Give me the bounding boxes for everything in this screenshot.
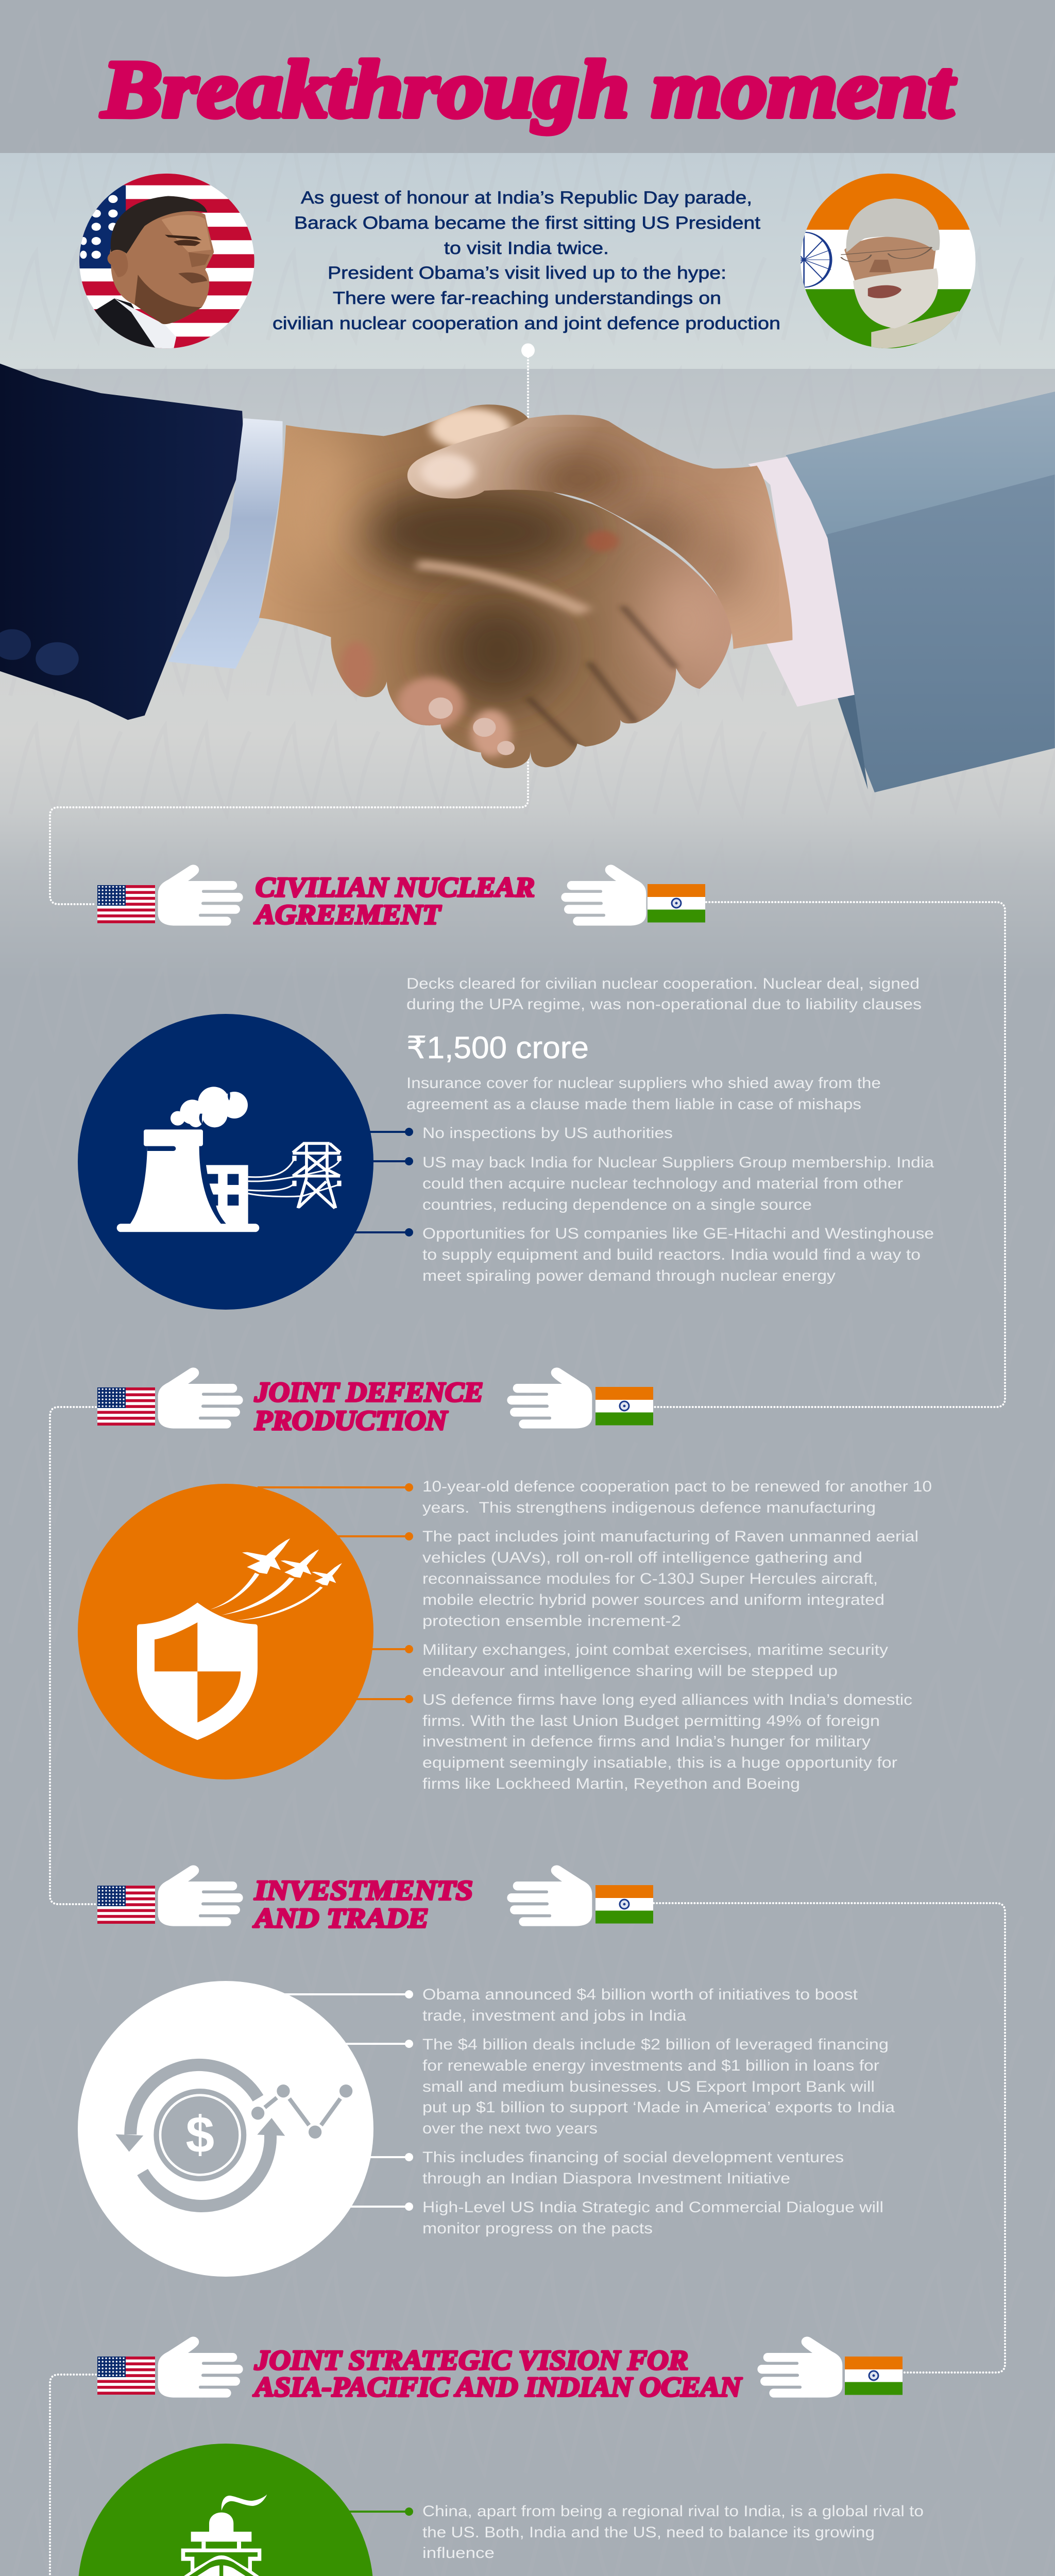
section 4 heading: joint strategic vision [97, 2337, 903, 2402]
flag: USA [97, 1886, 155, 1924]
panel: section 3 content [78, 1981, 895, 2277]
text block: small and medium businesses. US Export Import Bank will [422, 2078, 875, 2095]
section 2 heading: joint defence production [97, 1368, 653, 1436]
icon: ship on hand [140, 2495, 323, 2576]
text block: during the UPA regime, was non-operational due to liability clauses [406, 996, 922, 1013]
text block [422, 1986, 895, 2237]
right hand [407, 415, 792, 649]
icon: currency cycle and graph [115, 2065, 352, 2206]
icon: right hand [757, 2337, 842, 2398]
intro text: to visit India twice. [444, 239, 609, 258]
circle [78, 2444, 373, 2576]
heading text: PRODUCTION [254, 1405, 448, 1436]
panel: section 4 content [78, 2444, 925, 2576]
figure: 1,500 crore: ₹1,500 crore [406, 1030, 589, 1065]
bullet connectors [258, 1484, 413, 1703]
portrait: Modi on Indian flag [801, 173, 976, 348]
text block: No inspections by US authorities [422, 1125, 673, 1142]
text block: High-Level US India Strategic and Commercial Dialogue will [422, 2199, 883, 2216]
left shirt cuff [168, 418, 283, 669]
text block: The pact includes joint manufacturing of Raven unmanned aerial [422, 1528, 918, 1545]
text block: to supply equipment and build reactors. India would find a way to [422, 1246, 921, 1263]
panel: section 1 content [78, 975, 934, 1310]
icon: currency cycle and graph: $ [186, 2106, 214, 2163]
text block: for renewable energy investments and $1 billion in loans for [422, 2057, 879, 2074]
portrait: Obama on US flag [74, 172, 262, 350]
text block: equipment seemingly insatiable, this is a huge opportunity for [422, 1754, 897, 1771]
heading text: CIVILIAN NUCLEAR [256, 872, 535, 903]
heading text: JOINT DEFENCE [254, 1377, 483, 1408]
text block: US may back India for Nuclear Suppliers Group membership. India [422, 1154, 934, 1171]
icon: right hand [561, 865, 646, 926]
icon: left hand [158, 865, 243, 926]
right sleeve [786, 392, 1055, 792]
heading text: AND TRADE [253, 1903, 429, 1934]
intro text: There were far-reaching understandings on [333, 289, 721, 308]
text block: vehicles (UAVs), roll on-roll off intelligence gathering and [422, 1549, 862, 1566]
text block: endeavour and intelligence sharing will be stepped up [422, 1663, 838, 1680]
text block: through an Indian Diaspora Investment Initiative [422, 2170, 790, 2187]
text block: protection ensemble increment-2 [422, 1613, 681, 1630]
bullet connectors [258, 1991, 413, 2210]
text block: Obama announced $4 billion worth of initiatives to boost [422, 1986, 858, 2003]
text block: monitor progress on the pacts [422, 2220, 653, 2237]
text block: could then acquire nuclear technology and material from other [422, 1175, 903, 1192]
text block: Insurance cover for nuclear suppliers who shied away from the [406, 1075, 881, 1092]
text block: Decks cleared for civilian nuclear cooperation. Nuclear deal, signed [406, 975, 920, 992]
flag: India [845, 2357, 903, 2395]
icon: nuclear plant and pylon [117, 1087, 342, 1232]
intro text: As guest of honour at India’s Republic Day parade, [301, 188, 752, 208]
icon: left hand [158, 2337, 243, 2398]
panel: intro band [0, 153, 1055, 369]
icon: left hand [158, 1368, 243, 1429]
icon: right hand [507, 1866, 592, 1926]
heading text [253, 2345, 742, 2402]
heading text: AGREEMENT [254, 899, 441, 930]
text block: reconnaissance modules for C-130J Super Hercules aircraft, [422, 1570, 878, 1587]
text block: Military exchanges, joint combat exercises, maritime security [422, 1641, 888, 1658]
handshake photo [0, 364, 1055, 792]
text block: meet spiraling power demand through nuclear energy [422, 1267, 836, 1284]
section 1 heading: civilian nuclear agreement [97, 865, 705, 930]
text block: firms. With the last Union Budget permitting 49% of foreign [422, 1713, 880, 1730]
intro text: President Obama’s visit lived up to the hype: [328, 263, 726, 283]
connector dot [521, 343, 535, 358]
heading text: ASIA-PACIFIC AND INDIAN OCEAN [253, 2371, 742, 2402]
text block: This includes financing of social development ventures [422, 2149, 844, 2166]
dotted connector: section 3 to 4 [654, 1903, 1005, 2372]
right shirt cuff [748, 457, 855, 707]
icon: right hand [507, 1368, 592, 1429]
heading text [254, 1377, 483, 1436]
intro text: Barack Obama became the first sitting US President [294, 213, 761, 233]
circle [78, 1014, 373, 1310]
text block: influence [422, 2545, 495, 2562]
heading text: INVESTMENTS [254, 1875, 473, 1906]
dotted connector: section 1 to 2 [654, 902, 1005, 1407]
flag: India [648, 884, 705, 922]
bullet connectors [258, 1128, 413, 1236]
panel: section 2 content [78, 1478, 932, 1792]
text block: China, apart from being a regional rival to India, is a global rival to [422, 2503, 924, 2520]
icon: chakra [801, 232, 832, 287]
text block [422, 2503, 925, 2576]
text block: mobile electric hybrid power sources and uniform integrated [422, 1591, 884, 1608]
flag: USA [97, 2357, 155, 2395]
flag: USA [97, 885, 155, 923]
icon: shield and jets [137, 1538, 342, 1740]
dotted connector: section 4 to footer [50, 2375, 96, 2576]
text block: 10-year-old defence cooperation pact to be renewed for another 10 [422, 1478, 932, 1495]
circle [78, 1981, 373, 2277]
left hand [259, 404, 732, 768]
text block [406, 975, 934, 1284]
text block: firms like Lockheed Martin, Reyethon and Boeing [422, 1775, 800, 1792]
flag: India [595, 1885, 653, 1924]
text block: The $4 billion deals include $2 billion of leveraged financing [422, 2036, 889, 2053]
title: Breakthrough moment [101, 44, 956, 134]
intro text [273, 188, 780, 333]
text block: investment in defence firms and India’s hunger for military [422, 1733, 871, 1750]
text block: agreement as a clause made them liable in case of mishaps [406, 1096, 861, 1113]
circle [78, 1484, 373, 1780]
text block: Opportunities for US companies like GE-Hitachi and Westinghouse [422, 1225, 934, 1242]
text block: years. This strengthens indigenous defence manufacturing [422, 1499, 876, 1516]
left sleeve [0, 364, 244, 720]
flag: India [595, 1387, 653, 1425]
dotted connector: intro to section 1 [50, 357, 528, 904]
heading text [253, 1875, 473, 1934]
text block: put up $1 billion to support ‘Made in America’ exports to India [422, 2099, 895, 2116]
icon: left hand [158, 1866, 243, 1926]
dotted connector: section 2 to 3 [50, 1407, 96, 1904]
bullet connectors [258, 2508, 413, 2576]
text block: the US. Both, India and the US, need to balance its growing [422, 2524, 875, 2541]
text block: over the next two years [422, 2120, 598, 2137]
text block [422, 1478, 932, 1792]
section 3 heading: investments and trade [97, 1866, 653, 1934]
text block: trade, investment and jobs in India [422, 2007, 687, 2024]
heading text: JOINT STRATEGIC VISION FOR [254, 2345, 688, 2376]
intro text: civilian nuclear cooperation and joint defence production [273, 314, 780, 333]
heading text [254, 872, 535, 930]
flag: USA [97, 1387, 155, 1426]
text block: countries, reducing dependence on a single source [422, 1196, 812, 1213]
text block: US defence firms have long eyed alliances with India’s domestic [422, 1691, 912, 1708]
